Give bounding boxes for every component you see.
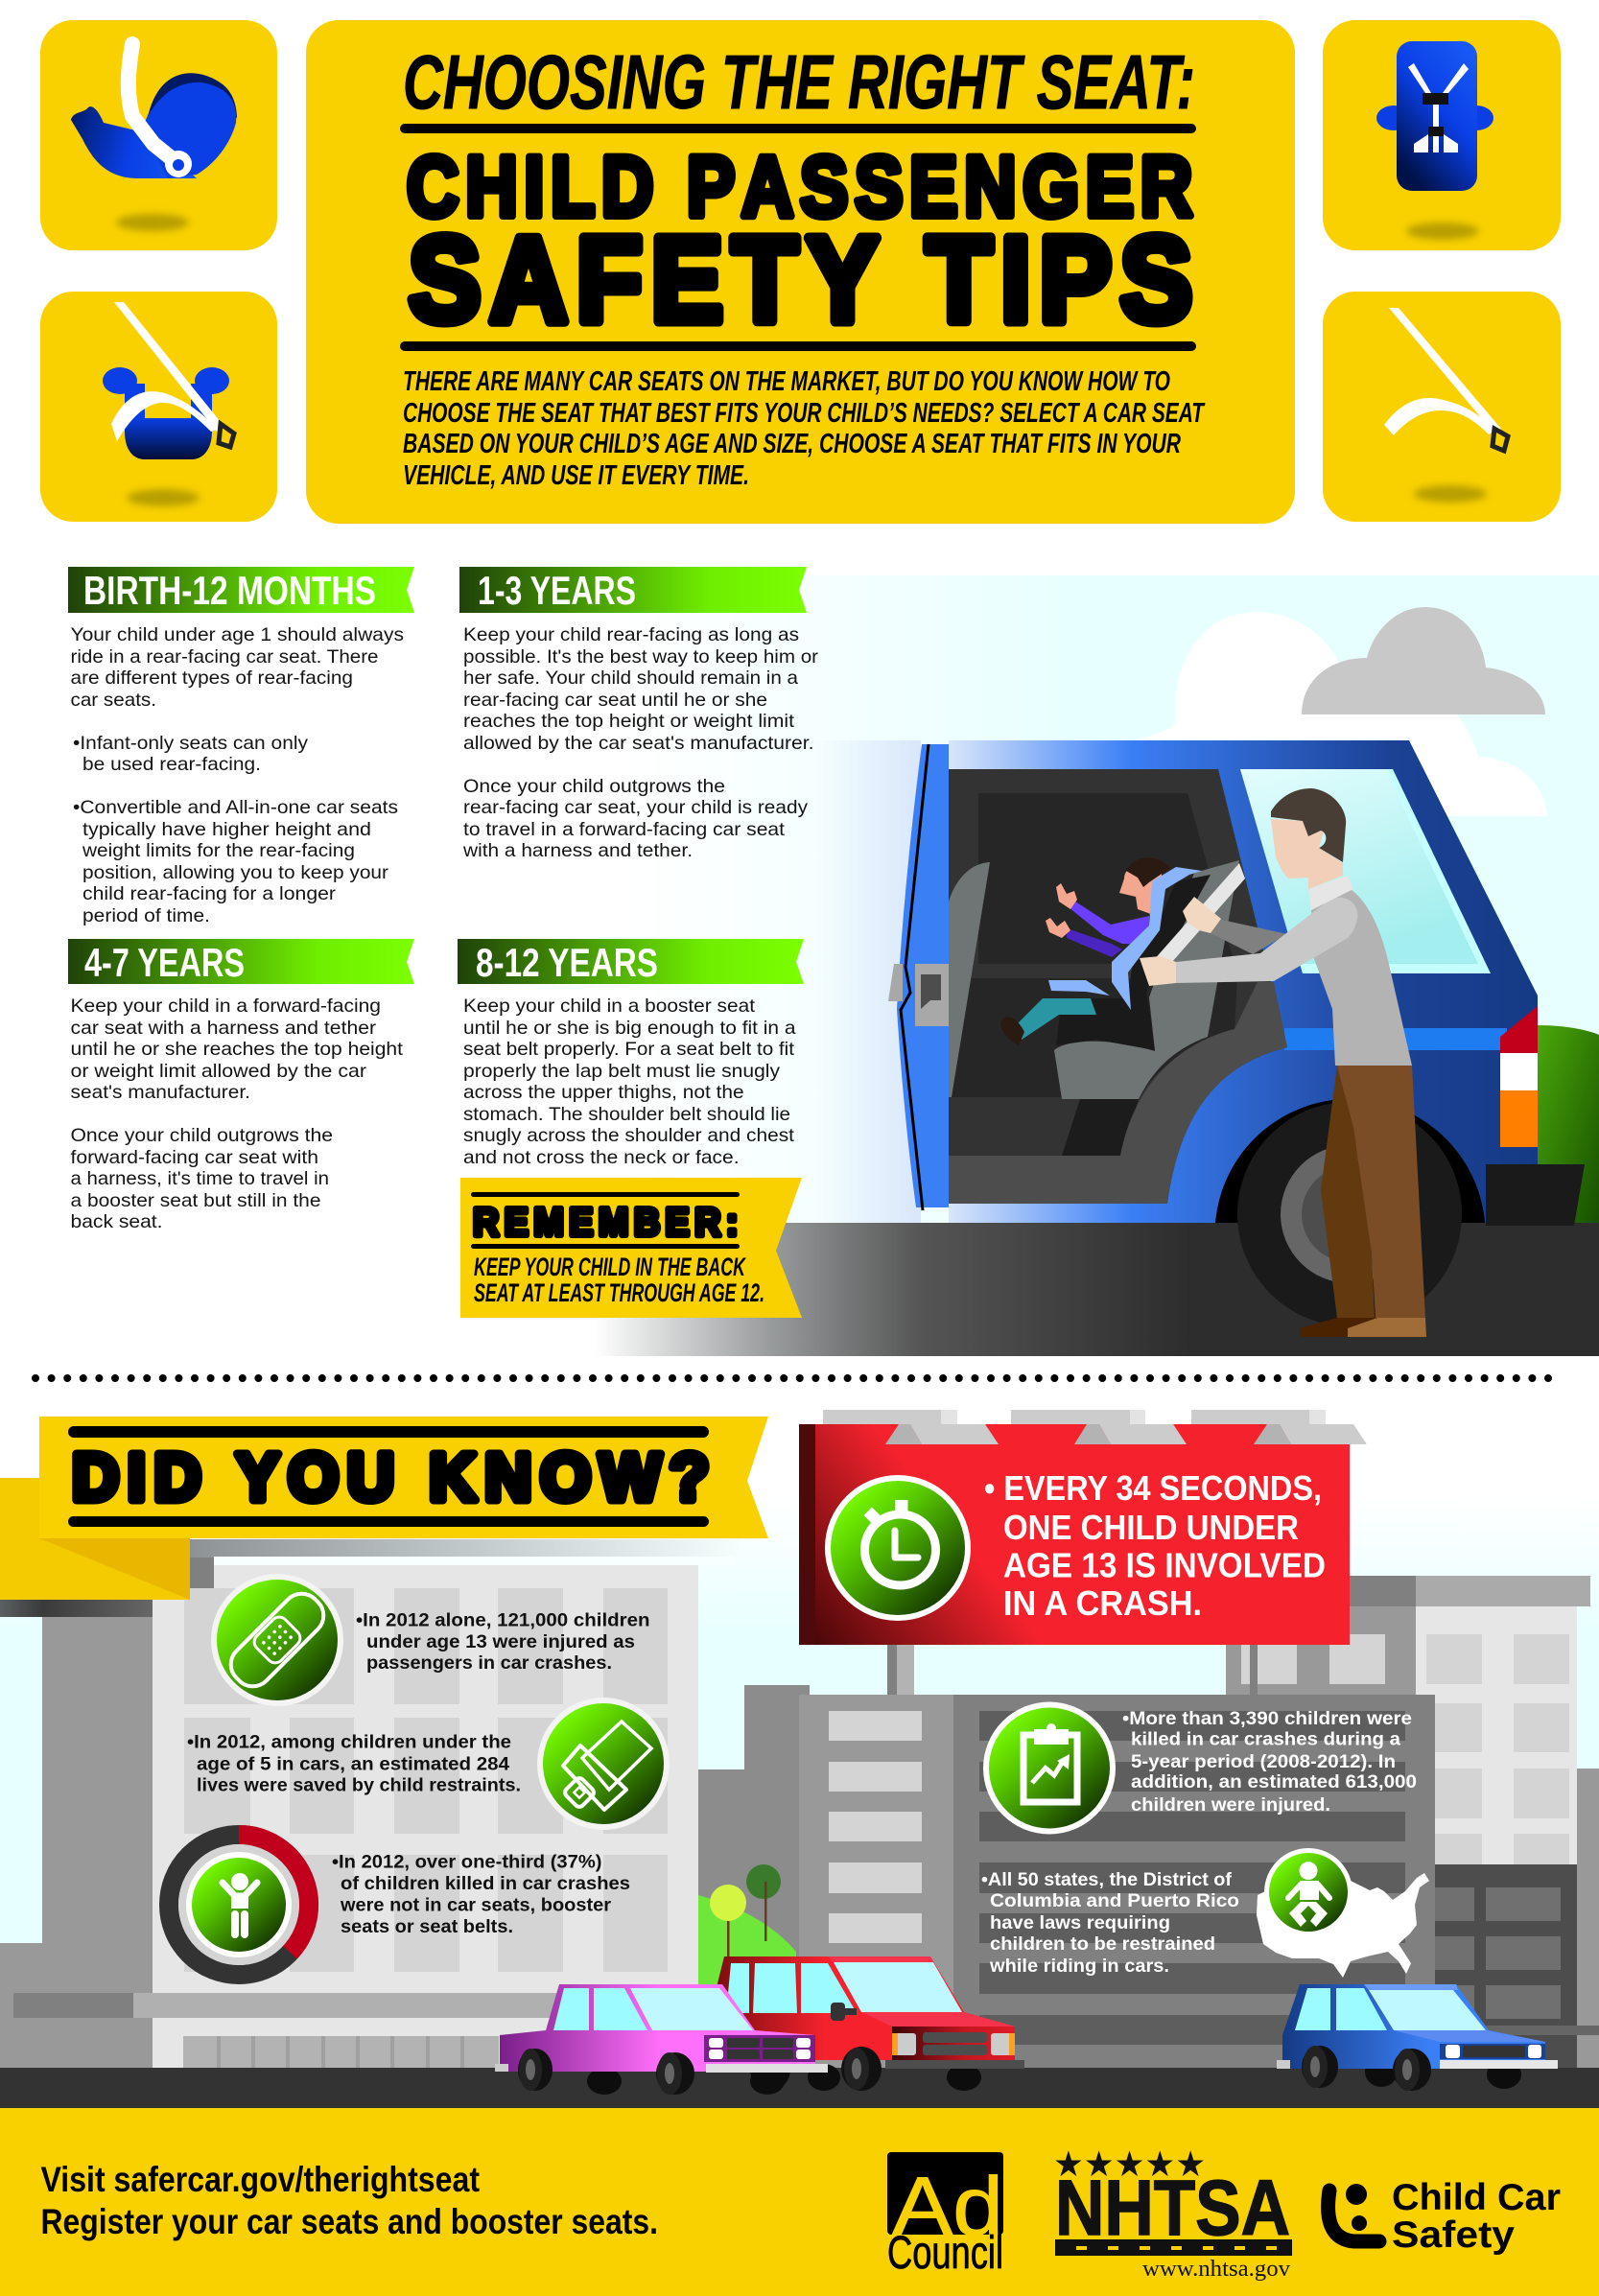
- man face and neck: [1271, 819, 1343, 889]
- car seat shell: [1056, 875, 1211, 1050]
- garage: [183, 2036, 499, 2068]
- text block: her safe. Your child should remain in a: [463, 668, 798, 689]
- fact: all 50 states: while riding in cars.: [989, 1956, 1169, 1977]
- billboard message: [984, 1468, 1326, 1623]
- awning: [13, 1993, 133, 2018]
- text block: rear-facing car seat, your child is ready: [463, 797, 808, 818]
- fact: 3,390 children killed: •More than 3,390 children were: [1122, 1708, 1412, 1729]
- icon: baby: [1264, 1848, 1352, 1936]
- text block: reaches the top height or weight limit: [463, 711, 795, 732]
- footer band: [0, 2108, 1599, 2296]
- text block: [462, 624, 819, 861]
- text block: stomach. The shoulder belt should lie: [463, 1104, 790, 1125]
- building: left tower: [42, 1617, 153, 2068]
- footer call to action: Visit safercar.gov/therightseat: [40, 2160, 480, 2199]
- panel: 4 to 7 years: 4-7 YEARS: [84, 940, 245, 985]
- logo: Child Car Safety: Safety: [1392, 2214, 1515, 2256]
- man collar: [1308, 876, 1353, 910]
- callout: remember: KEEP YOUR CHILD IN THE BACK: [474, 1253, 747, 1281]
- building: main white: [153, 1565, 698, 2068]
- text block: until he or she reaches the top height: [71, 1039, 404, 1060]
- fact: 121,000 injured: •In 2012 alone, 121,000 children: [356, 1609, 650, 1630]
- top rule: [400, 124, 1196, 133]
- billboard message: ONE CHILD UNDER: [1003, 1508, 1299, 1547]
- text block: to travel in a forward-facing car seat: [463, 819, 786, 840]
- text block: typically have higher height and: [82, 819, 371, 840]
- left seat: [949, 862, 990, 1097]
- text block: Your child under age 1 should always: [71, 624, 404, 645]
- text block: with a harness and tether.: [462, 840, 693, 861]
- fact: 121,000 injured: [356, 1609, 650, 1674]
- text block: Keep your child in a booster seat: [463, 996, 756, 1017]
- text block: snugly across the shoulder and chest: [463, 1125, 795, 1146]
- banner: did you know: [0, 1417, 768, 1600]
- text block: [71, 624, 404, 926]
- man shoes: [1300, 1318, 1426, 1337]
- rim: [1281, 1145, 1419, 1283]
- logo: Ad Council: Council: [887, 2228, 1003, 2279]
- wheel arch: [1215, 1099, 1485, 1223]
- icon: seat belt buckle: [537, 1698, 670, 1830]
- fact: 3,390 children killed: children were injured.: [1131, 1794, 1330, 1816]
- door opening: [949, 769, 1287, 1204]
- text block: •Convertible and All-in-one car seats: [73, 797, 398, 818]
- building: mid gray: [1226, 1606, 1416, 1698]
- text block: position, allowing you to keep your: [82, 862, 389, 883]
- door latch: [888, 964, 949, 1026]
- text block: across the upper thighs, not the: [463, 1082, 744, 1103]
- callout: remember: SEAT AT LEAST THROUGH AGE 12.: [474, 1278, 764, 1307]
- logo: Child Car Safety: Child Car: [1392, 2177, 1561, 2218]
- fact: 37 percent unrestrained: [332, 1851, 630, 1937]
- text block: a harness, it's time to travel in: [71, 1168, 329, 1189]
- man torso: [1311, 889, 1412, 1066]
- fact: 37 percent unrestrained: •In 2012, over one-third (37%): [332, 1851, 602, 1872]
- building: main gray: [799, 1695, 953, 2068]
- footer call to action: Register your car seats and booster seats.: [40, 2202, 658, 2241]
- text block: back seat.: [71, 1211, 163, 1232]
- child hands: [1046, 883, 1077, 938]
- billboard top bars: [823, 1410, 1326, 1424]
- man back arm: [1211, 918, 1287, 954]
- logo: NHTSA: NHTSA: [1055, 2165, 1290, 2252]
- banner: birth-12 months: [68, 567, 414, 613]
- title: choosing the right seat: CHOOSING THE RIGHT SEAT:: [403, 39, 1195, 125]
- hub: [1302, 1166, 1398, 1262]
- text block: weight limits for the rear-facing: [82, 840, 355, 861]
- text block: until he or she is big enough to fit in a: [463, 1018, 796, 1039]
- text block: car seats.: [71, 690, 156, 711]
- car: pink: [495, 1984, 828, 2095]
- illustration: parent buckling child into car: [595, 607, 1599, 1356]
- banner: did you know: DID YOU KNOW?: [72, 1440, 717, 1514]
- panel: 4 to 7 years: [68, 939, 414, 1232]
- fact: 3,390 children killed: [1122, 1708, 1417, 1816]
- fact: all 50 states: [981, 1869, 1239, 1977]
- panel: birth to 12 months: [68, 567, 414, 926]
- fact: all 50 states: •All 50 states, the District of: [981, 1869, 1233, 1890]
- icon: child: [223, 1873, 257, 1938]
- text block: Once your child outgrows the: [463, 776, 725, 797]
- intro paragraph: CHOOSE THE SEAT THAT BEST FITS YOUR CHILD’S NEEDS? SELECT A CAR SEAT: [403, 398, 1206, 429]
- fact: all 50 states: Columbia and Puerto Rico: [990, 1890, 1239, 1911]
- text block: Keep your child rear-facing as long as: [463, 624, 799, 645]
- icon: stopwatch: [825, 1475, 971, 1621]
- panel: birth to 12 months: BIRTH-12 MONTHS: [83, 568, 376, 613]
- man hair: [1271, 788, 1346, 862]
- text block: properly the lap belt must lie snugly: [463, 1061, 780, 1082]
- billboard posts: [887, 1645, 1258, 1695]
- icon: clipboard chart: [983, 1701, 1116, 1834]
- rear bumper: [1486, 1164, 1585, 1226]
- child body and arm: [1069, 900, 1149, 945]
- tire: [1237, 1102, 1462, 1326]
- text block: car seat with a harness and tether: [71, 1018, 377, 1039]
- cloud: gray: [1302, 607, 1545, 715]
- panel: 8 to 12 years: [458, 939, 804, 1168]
- intro paragraph: BASED ON YOUR CHILD’S AGE AND SIZE, CHOOSE A SEAT THAT FITS IN YOUR: [403, 429, 1181, 459]
- fact: 3,390 children killed: 5-year period (2008-2012). In: [1131, 1751, 1396, 1772]
- logo: NHTSA: [1053, 2144, 1292, 2282]
- bottom rule: [400, 341, 1196, 351]
- intro paragraph: THERE ARE MANY CAR SEATS ON THE MARKET, BUT DO YOU KNOW HOW TO: [403, 366, 1170, 397]
- text block: possible. It's the best way to keep him or: [463, 646, 819, 668]
- text block: rear-facing car seat until he or she: [463, 690, 767, 711]
- banner: 1-3 years: [459, 567, 807, 613]
- text block: child rear-facing for a longer: [82, 883, 337, 904]
- taillight: [1500, 1006, 1538, 1147]
- panel: convertible seat icon card: [1323, 20, 1561, 250]
- panel: infant seat icon card: [40, 20, 277, 250]
- panel: 1 to 3 years: 1-3 YEARS: [478, 568, 636, 613]
- text block: are different types of rear-facing: [71, 668, 353, 689]
- man front arm: [1176, 898, 1357, 983]
- hill and trees: [698, 1864, 796, 2068]
- child head: [1119, 862, 1163, 916]
- text block: allowed by the car seat's manufacturer.: [463, 733, 813, 754]
- icon: USA map: [1257, 1870, 1429, 1978]
- text block: •Infant-only seats can only: [73, 733, 308, 754]
- fact: 121,000 injured: passengers in car crashes.: [366, 1652, 612, 1674]
- cloud: white: [1137, 612, 1547, 816]
- fact: 284 lives saved: lives were saved by child restraints.: [197, 1774, 521, 1795]
- door fade: [815, 740, 921, 1223]
- fact: 37 percent unrestrained: were not in car seats, booster: [340, 1895, 611, 1916]
- fact: 37 percent unrestrained: seats or seat belts.: [341, 1916, 513, 1937]
- text block: period of time.: [82, 905, 210, 926]
- panel: 1 to 3 years: [459, 567, 819, 861]
- billboard message: AGE 13 IS INVOLVED: [1003, 1546, 1326, 1584]
- logo: NHTSA: ★★★★★: [1053, 2144, 1206, 2185]
- fact: 284 lives saved: •In 2012, among children under the: [187, 1732, 511, 1753]
- text block: Once your child outgrows the: [71, 1125, 333, 1146]
- fact: 37 percent unrestrained: of children killed in car crashes: [341, 1873, 630, 1894]
- billboard board: [799, 1424, 1350, 1645]
- lower cabin: [951, 978, 1237, 1099]
- child back arm: [1067, 928, 1122, 957]
- logo: Ad Council: [887, 2152, 1003, 2279]
- text block: [71, 996, 404, 1232]
- heading: child passenger: CHILD PASSENGER: [407, 138, 1199, 234]
- car: blue: [1277, 1984, 1558, 2091]
- fact: all 50 states: have laws requiring: [990, 1912, 1170, 1933]
- green hill: [1538, 1025, 1599, 1223]
- van side stripe: [1284, 1028, 1507, 1050]
- icon: bandage: [211, 1574, 343, 1706]
- intro paragraph: VEHICLE, AND USE IT EVERY TIME.: [403, 460, 749, 491]
- panel: title card: [306, 20, 1295, 524]
- callout: remember: REMEMBER:: [473, 1200, 743, 1244]
- billboard message: • EVERY 34 SECONDS,: [984, 1468, 1322, 1508]
- child leg: [1017, 998, 1096, 1040]
- intro paragraph: [403, 366, 1206, 491]
- building: dark: [1435, 1864, 1577, 2068]
- billboard message: IN A CRASH.: [1003, 1583, 1202, 1623]
- seat belt strap: [1145, 863, 1245, 985]
- logo: Ad Council: Ad: [892, 2161, 1003, 2253]
- panel: 8 to 12 years: 8-12 YEARS: [476, 940, 658, 985]
- fact: 3,390 children killed: killed in car crashes during a: [1131, 1728, 1400, 1749]
- building: far right: [1577, 1769, 1599, 2068]
- text block: Keep your child in a forward-facing: [71, 996, 381, 1017]
- car seat blue padding: [1112, 867, 1202, 1010]
- logo: NHTSA: www.nhtsa.gov: [1142, 2257, 1290, 2282]
- man hands: [1140, 897, 1221, 986]
- man back leg: [1321, 1066, 1375, 1318]
- fact: 121,000 injured: under age 13 were injured as: [366, 1631, 635, 1652]
- logo: Child Car Safety: [1329, 2177, 1561, 2256]
- door seam: [901, 744, 929, 1210]
- text block: a booster seat but still in the: [71, 1190, 320, 1211]
- footer call to action: [40, 2160, 658, 2241]
- city buildings: [0, 1539, 1599, 2068]
- fact: 3,390 children killed: addition, an estimated 613,000: [1131, 1771, 1417, 1792]
- text block: be used rear-facing.: [82, 754, 261, 775]
- scene: sky background: [460, 575, 1599, 1356]
- billboard lamps: [885, 1424, 1367, 1444]
- text block: seat's manufacturer.: [71, 1082, 250, 1103]
- door sill: [949, 982, 1287, 1204]
- text block: and not cross the neck or face.: [463, 1147, 740, 1168]
- text block: seat belt properly. For a seat belt to fit: [463, 1039, 795, 1060]
- text block: or weight limit allowed by the car: [71, 1061, 367, 1082]
- heading: safety tips: SAFETY TIPS: [409, 212, 1201, 347]
- van door: [897, 744, 949, 1207]
- man front leg: [1337, 1066, 1425, 1318]
- banner: 8-12 years: [458, 939, 804, 984]
- van body: [949, 740, 1538, 1223]
- text block: [463, 996, 796, 1168]
- panel: seat belt icon card: [1323, 292, 1561, 522]
- text block: forward-facing car seat with: [71, 1147, 318, 1168]
- road: lower street: [0, 2068, 1599, 2108]
- car: red: [691, 1956, 1024, 2091]
- road: [595, 1223, 1599, 1356]
- rear window: [978, 793, 1235, 964]
- chart: 37 percent donut with child icon: [169, 1835, 309, 1975]
- panel: booster seat icon card: [40, 292, 277, 522]
- child shoe: [1000, 1017, 1024, 1045]
- fact: 284 lives saved: [187, 1732, 521, 1795]
- banner: 4-7 years: [68, 939, 414, 984]
- windshield: [1240, 769, 1491, 973]
- fact: all 50 states: children to be restrained: [990, 1933, 1215, 1955]
- text block: ride in a rear-facing car seat. There: [71, 646, 378, 668]
- fact: 284 lives saved: age of 5 in cars, an estimated 284: [197, 1753, 509, 1774]
- car seat base: [1054, 860, 1239, 1099]
- callout: remember: [460, 1178, 802, 1318]
- building: behind left: [698, 1769, 744, 2068]
- billboard: [799, 1410, 1367, 1695]
- scene: lower sky: [0, 1448, 1599, 2072]
